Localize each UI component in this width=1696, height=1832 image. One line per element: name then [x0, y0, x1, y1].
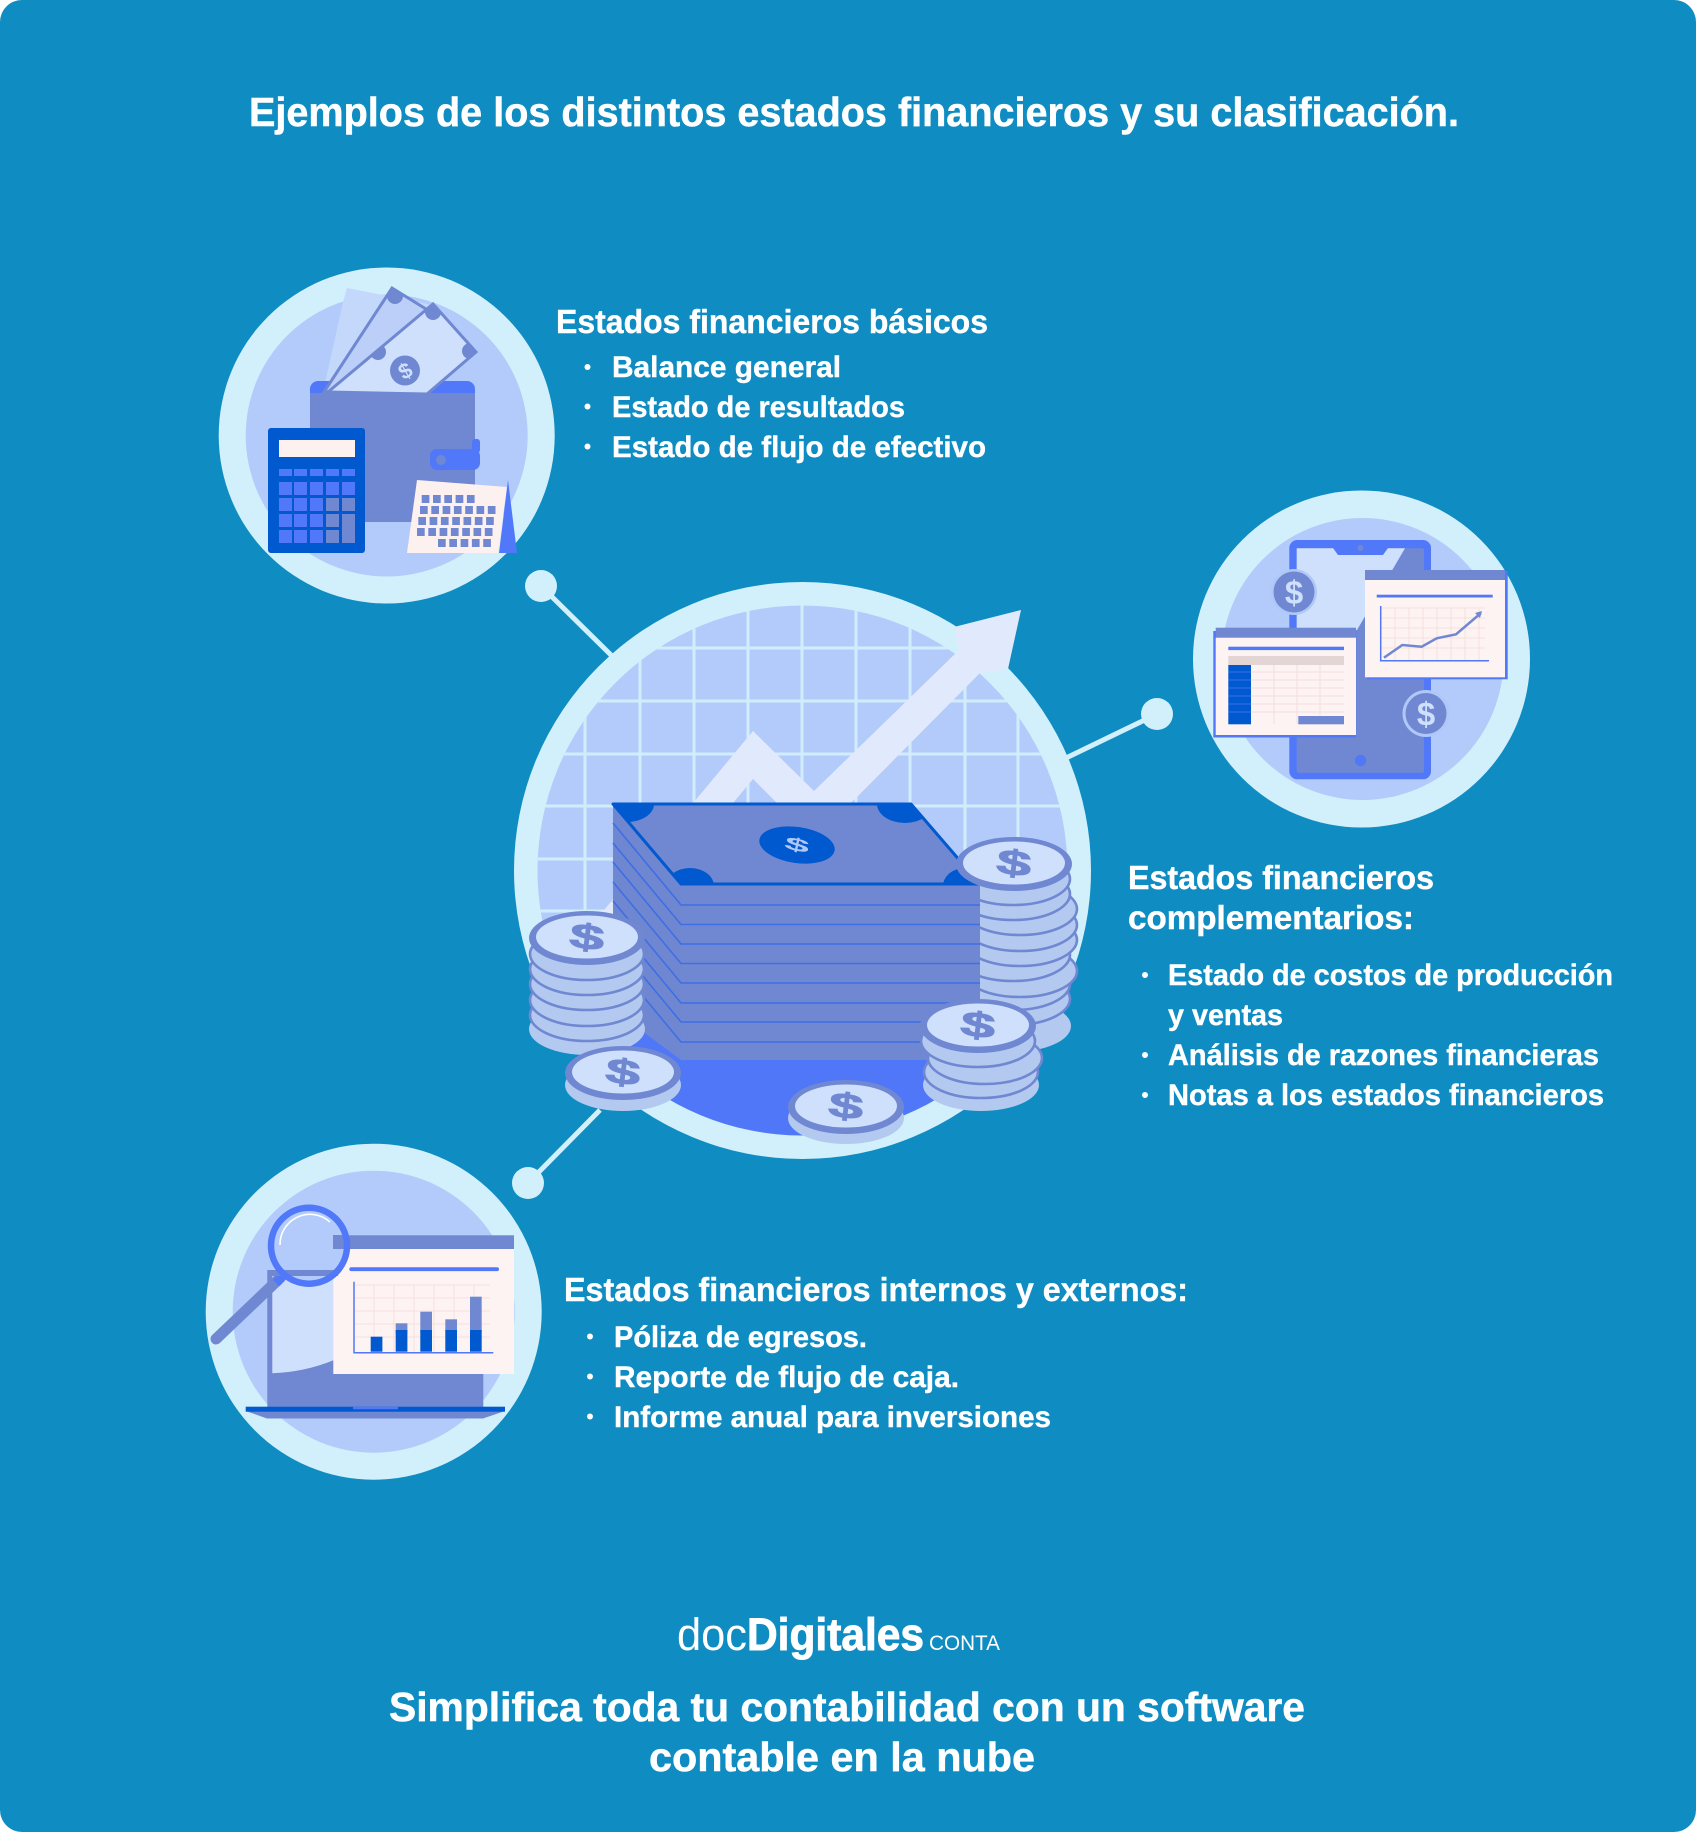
coin pile: lower right — [920, 999, 1042, 1111]
logo: docDigitales CONTA — [677, 1609, 1000, 1660]
heading: Estados financieros internos y externos: — [564, 1271, 1188, 1308]
front bill with dollar — [328, 304, 478, 394]
dollar coin: lower: $ — [1417, 696, 1435, 732]
dollar coin: upper: $ — [1285, 574, 1303, 611]
circle illustration: laptop and magnifier — [206, 1144, 542, 1480]
front bill with dollar: $ — [394, 357, 417, 385]
main circle ring — [514, 582, 1091, 1159]
wallet body — [310, 393, 475, 522]
connector: bottom left — [512, 1110, 600, 1199]
top bill face — [613, 804, 980, 884]
calendar — [407, 480, 517, 553]
bullet list: Balance general — [612, 351, 841, 384]
report window: line chart — [1365, 570, 1508, 679]
chart grid background — [520, 600, 1090, 1145]
call to action: contable en la nube — [649, 1734, 1035, 1780]
bullet list: Reporte de flujo de caja. — [614, 1361, 959, 1394]
back bill — [323, 288, 433, 392]
report window: table — [1213, 628, 1356, 738]
circle ring — [1193, 490, 1530, 828]
coin: bottom centre: $ — [826, 1084, 866, 1128]
report window: bar chart — [333, 1235, 514, 1374]
laptop — [246, 1270, 505, 1418]
dollar coin: lower — [1402, 690, 1450, 737]
middle bill — [324, 288, 434, 392]
circle ring — [206, 1144, 542, 1480]
call to action: Simplifica toda tu contabilidad con un software — [389, 1684, 1305, 1730]
coin: lower left — [565, 1046, 681, 1111]
central illustration: money stack and growth chart — [514, 582, 1091, 1159]
bullet list: Notas a los estados financieros — [1168, 1079, 1604, 1112]
heading — [1128, 859, 1434, 936]
growth arrow — [600, 610, 1021, 915]
wallet back — [310, 381, 475, 441]
inner disc — [246, 294, 528, 576]
coin pile: lower right: $ — [958, 1003, 998, 1047]
text block: estados financieros internos y externos — [564, 1271, 1188, 1434]
heading: complementarios: — [1128, 899, 1414, 936]
bullet list: Análisis de razones financieras — [1168, 1039, 1599, 1072]
text block: estados financieros basicos — [556, 303, 988, 464]
inner disc — [1222, 518, 1504, 800]
coin pile: left — [529, 911, 645, 1055]
wallet strap — [430, 439, 480, 470]
logo: docDigitales CONTA: CONTA — [929, 1632, 1000, 1655]
logo: docDigitales CONTA: Digitales — [747, 1609, 924, 1660]
logo: docDigitales CONTA: doc — [677, 1609, 747, 1660]
bullet list: y ventas — [1168, 999, 1283, 1032]
bill stack — [611, 802, 980, 1060]
bill stack: $ — [783, 833, 811, 858]
coin: top of right pile: $ — [994, 841, 1034, 885]
tablet — [1289, 540, 1431, 779]
coins behind stack: right pile — [955, 853, 1077, 1052]
bullet list: Póliza de egresos. — [614, 1321, 867, 1354]
coin: top of right pile — [956, 837, 1072, 891]
bullet list — [587, 1321, 1051, 1434]
coin: lower left: $ — [603, 1050, 643, 1094]
bullet list: Estado de flujo de efectivo — [612, 431, 986, 464]
circle illustration: wallet, calculator and calendar — [219, 268, 555, 604]
circle illustration: tablet with reports — [1193, 490, 1530, 828]
calculator — [268, 428, 365, 553]
call to action — [389, 1684, 1305, 1780]
bullet list — [584, 351, 986, 464]
coin pile: left: $ — [567, 915, 607, 959]
connector: right — [1066, 698, 1173, 758]
magnifying glass — [216, 1208, 347, 1339]
connector: top left — [525, 570, 612, 656]
inner disc — [233, 1171, 515, 1453]
dollar coin: upper — [1271, 569, 1317, 615]
heading: Estados financieros — [1128, 859, 1434, 896]
bullet list — [1142, 959, 1613, 1112]
text block: estados financieros complementarios — [1128, 859, 1613, 1112]
heading: Estados financieros básicos — [556, 303, 988, 340]
title: Ejemplos de los distintos estados financieros y su clasificación. — [249, 89, 1459, 135]
bullet list: Estado de resultados — [612, 391, 905, 424]
bullet list: Estado de costos de producción — [1168, 959, 1613, 992]
bullet list: Informe anual para inversiones — [614, 1401, 1051, 1434]
circle ring — [219, 268, 555, 604]
coin: bottom centre — [788, 1080, 904, 1144]
